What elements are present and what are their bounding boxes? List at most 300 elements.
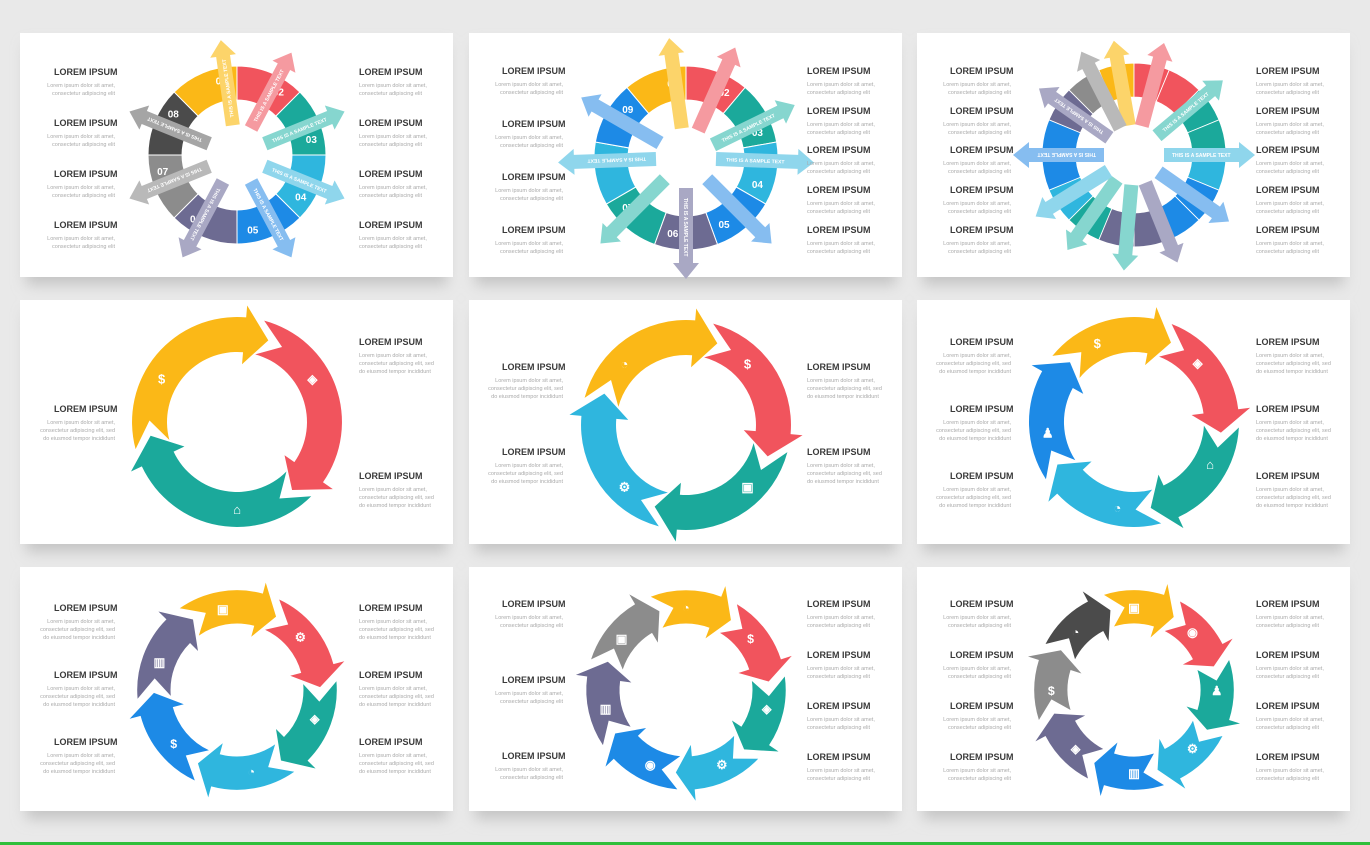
- wheel 1 numbers: 04: [295, 192, 307, 203]
- cycle 6 arrows: [127, 582, 347, 798]
- panel 6 text blocks: consectetur adipiscing elit, sed: [1256, 428, 1331, 434]
- panel 8 text blocks: consectetur adipiscing elit: [807, 725, 870, 731]
- cycle 6 arrows: $: [170, 737, 177, 751]
- wheel 1 arrow strips: THIS IS A SAMPLE TEXT: [253, 69, 286, 123]
- panel 9 text blocks: consectetur adipiscing elit: [1256, 674, 1319, 680]
- panel 8 text blocks: LOREM IPSUM: [502, 599, 566, 609]
- wheel 2 numbers: 08: [604, 154, 616, 165]
- panel 3 text blocks: Lorem ipsum dolor sit amet,: [1256, 122, 1324, 128]
- cycle 3 arrows: ◈: [306, 372, 318, 386]
- panel 5 text blocks: consectetur adipiscing elit, sed: [488, 471, 563, 477]
- wheel 1 numbers: 01: [216, 77, 227, 88]
- panel 7 text blocks: consectetur adipiscing elit, sed: [40, 694, 115, 700]
- panel 3 text blocks: LOREM IPSUM: [950, 106, 1014, 116]
- panel 9 text blocks: Lorem ipsum dolor sit amet,: [1256, 666, 1324, 672]
- panel 7 text blocks: Lorem ipsum dolor sit amet,: [359, 753, 427, 759]
- panel 6 text blocks: consectetur adipiscing elit, sed: [936, 495, 1011, 501]
- panel 7: 6-arrow cycle: [20, 567, 453, 811]
- panel 3 text blocks: Lorem ipsum dolor sit amet,: [943, 161, 1011, 167]
- panel 5: 4-arrow cycle: [469, 296, 902, 554]
- panel 9: 8-arrow cycle: [917, 567, 1350, 811]
- cycle 7 arrows: ▥: [600, 702, 611, 716]
- panel 9 text blocks: Lorem ipsum dolor sit amet,: [943, 666, 1011, 672]
- panel 2 text blocks: LOREM IPSUM: [502, 119, 566, 129]
- panel 9 text blocks: consectetur adipiscing elit: [1256, 725, 1319, 731]
- panel 3 text blocks: Lorem ipsum dolor sit amet,: [943, 82, 1011, 88]
- panel 8 text blocks: Lorem ipsum dolor sit amet,: [495, 615, 563, 621]
- panel 1 text blocks: LOREM IPSUM: [359, 118, 423, 128]
- panel 1 text blocks: LOREM IPSUM: [54, 118, 118, 128]
- panel 1 text blocks: LOREM IPSUM: [359, 67, 423, 77]
- panel 3 text blocks: LOREM IPSUM: [950, 225, 1014, 235]
- panel 3 text blocks: LOREM IPSUM: [1256, 185, 1320, 195]
- panel 6 text blocks: do eiusmod tempor incididunt: [939, 436, 1011, 442]
- panel 7 text blocks: consectetur adipiscing elit, sed: [359, 694, 434, 700]
- panel 4 text blocks: LOREM IPSUM: [359, 471, 423, 481]
- panel 3 text blocks: LOREM IPSUM: [1256, 106, 1320, 116]
- panel 4 text blocks: do eiusmod tempor incididunt: [359, 503, 431, 509]
- cycle 5 arrows: [1027, 302, 1255, 538]
- wheel 1 numbers: [155, 74, 320, 239]
- panel 1 text blocks: Lorem ipsum dolor sit amet,: [359, 236, 427, 242]
- panel 1 text blocks: Lorem ipsum dolor sit amet,: [47, 236, 115, 242]
- panel 7 text blocks: Lorem ipsum dolor sit amet,: [359, 686, 427, 692]
- panel 6 text blocks: Lorem ipsum dolor sit amet,: [1256, 487, 1324, 493]
- panel 5 text blocks: consectetur adipiscing elit, sed: [807, 386, 882, 392]
- panel 8 text blocks: [495, 599, 875, 782]
- panel 2 text blocks: consectetur adipiscing elit: [807, 209, 870, 215]
- panel 3 text blocks: LOREM IPSUM: [950, 66, 1014, 76]
- panel 1: 8-step wheel: [20, 33, 453, 277]
- panel 7 text blocks: do eiusmod tempor incididunt: [43, 769, 115, 775]
- panel 7 text blocks: LOREM IPSUM: [359, 670, 423, 680]
- cycle 7 arrows: ◔: [682, 601, 690, 615]
- panel 3 text blocks: LOREM IPSUM: [950, 145, 1014, 155]
- panel 1 text blocks: consectetur adipiscing elit: [359, 193, 422, 199]
- panel 6 text blocks: consectetur adipiscing elit, sed: [1256, 361, 1331, 367]
- panel 9 text blocks: consectetur adipiscing elit: [948, 725, 1011, 731]
- cycle 3 arrows: ⌂: [233, 502, 241, 517]
- panel 2 text blocks: Lorem ipsum dolor sit amet,: [807, 82, 875, 88]
- panel 8 text blocks: consectetur adipiscing elit: [807, 674, 870, 680]
- wheel 2 numbers: 05: [718, 220, 730, 231]
- panel 9 text blocks: consectetur adipiscing elit: [1256, 776, 1319, 782]
- panel 3 text blocks: Lorem ipsum dolor sit amet,: [943, 201, 1011, 207]
- panel 7 text blocks: do eiusmod tempor incididunt: [359, 702, 431, 708]
- panel 7 text blocks: LOREM IPSUM: [54, 737, 118, 747]
- panel 7 text blocks: do eiusmod tempor incididunt: [43, 635, 115, 641]
- wheel 1 arrow strips: THIS IS A SAMPLE TEXT: [147, 115, 203, 143]
- panel 1 text blocks: consectetur adipiscing elit: [359, 244, 422, 250]
- cycle 7 arrows: ▣: [616, 632, 627, 646]
- panel 5 text blocks: do eiusmod tempor incididunt: [807, 479, 879, 485]
- wheel 2 numbers: 01: [667, 79, 679, 90]
- wheel 3 arrow strips: THIS IS A SAMPLE TEXT: [1037, 151, 1096, 157]
- wheel 1 numbers: 02: [273, 87, 284, 98]
- panel 9 text blocks: [943, 599, 1324, 782]
- panel 9 text blocks: LOREM IPSUM: [1256, 752, 1320, 762]
- panel 5 text blocks: do eiusmod tempor incididunt: [491, 479, 563, 485]
- wheel 3 arrow strips: THIS IS A SAMPLE TEXT: [1054, 96, 1105, 135]
- panel 2 text blocks: Lorem ipsum dolor sit amet,: [495, 135, 563, 141]
- panel 9 text blocks: Lorem ipsum dolor sit amet,: [943, 615, 1011, 621]
- panel 3 text blocks: Lorem ipsum dolor sit amet,: [943, 241, 1011, 247]
- wheel 2 numbers: [604, 77, 767, 242]
- panel 1 text blocks: consectetur adipiscing elit: [52, 91, 115, 97]
- panel 3 text blocks: LOREM IPSUM: [1256, 145, 1320, 155]
- panel 6 text blocks: LOREM IPSUM: [1256, 471, 1320, 481]
- panel 5 text blocks: consectetur adipiscing elit, sed: [807, 471, 882, 477]
- panel 3 text blocks: consectetur adipiscing elit: [948, 209, 1011, 215]
- cycle 7 arrows: ◉: [645, 758, 656, 772]
- panel 6 text blocks: Lorem ipsum dolor sit amet,: [943, 487, 1011, 493]
- panel 7 text blocks: LOREM IPSUM: [359, 603, 423, 613]
- panel 7 text blocks: Lorem ipsum dolor sit amet,: [359, 619, 427, 625]
- wheel 2 arrow strips: THIS IS A SAMPLE TEXT: [587, 155, 646, 163]
- panel 8 text blocks: Lorem ipsum dolor sit amet,: [807, 717, 875, 723]
- panel 6 text blocks: LOREM IPSUM: [950, 471, 1014, 481]
- panel 1 text blocks: consectetur adipiscing elit: [52, 193, 115, 199]
- panel 2 text blocks: consectetur adipiscing elit: [807, 169, 870, 175]
- panel 3 text blocks: [943, 66, 1324, 255]
- panel 5 text blocks: [488, 362, 882, 485]
- panel 2 text blocks: Lorem ipsum dolor sit amet,: [495, 188, 563, 194]
- panel 2 text blocks: LOREM IPSUM: [807, 225, 871, 235]
- panel 1 text blocks: LOREM IPSUM: [359, 220, 423, 230]
- panel 2 text blocks: consectetur adipiscing elit: [807, 130, 870, 136]
- wheel 1 numbers: 08: [168, 110, 179, 121]
- panel 1 text blocks: LOREM IPSUM: [54, 67, 118, 77]
- panel 2 text blocks: consectetur adipiscing elit: [500, 196, 563, 202]
- cycle 7 arrows: ⚙: [716, 758, 727, 772]
- panel 9 text blocks: LOREM IPSUM: [950, 599, 1014, 609]
- cycle 8 arrows: [1028, 584, 1240, 796]
- wheel 2 numbers: 03: [752, 128, 763, 139]
- panel 9 text blocks: consectetur adipiscing elit: [948, 623, 1011, 629]
- cycle 6 arrows: ▥: [153, 655, 165, 669]
- panel 6 text blocks: [936, 337, 1331, 509]
- wheel 1 numbers: 03: [306, 135, 317, 146]
- wheel 2 numbers: 09: [622, 105, 634, 116]
- wheel 2 numbers: 06: [667, 229, 679, 240]
- panel 5 text blocks: do eiusmod tempor incididunt: [807, 394, 879, 400]
- panel 1 text blocks: Lorem ipsum dolor sit amet,: [359, 134, 427, 140]
- panel 8: 7-arrow cycle: [469, 567, 902, 811]
- panel 6 text blocks: LOREM IPSUM: [950, 337, 1014, 347]
- panel 2: 9-step wheel: [469, 33, 902, 279]
- panel 5 text blocks: LOREM IPSUM: [807, 362, 871, 372]
- panel 4 text blocks: Lorem ipsum dolor sit amet,: [359, 353, 427, 359]
- panel 7 text blocks: do eiusmod tempor incididunt: [359, 769, 431, 775]
- panel 2 text blocks: LOREM IPSUM: [502, 66, 566, 76]
- panel 7 text blocks: [40, 603, 434, 775]
- panel 7 text blocks: LOREM IPSUM: [359, 737, 423, 747]
- panel 9 text blocks: LOREM IPSUM: [1256, 701, 1320, 711]
- panel 6 text blocks: consectetur adipiscing elit, sed: [936, 361, 1011, 367]
- panel 7 text blocks: consectetur adipiscing elit, sed: [359, 627, 434, 633]
- panel 8 text blocks: consectetur adipiscing elit: [807, 623, 870, 629]
- wheel 3 arrow strips: THIS IS A SAMPLE TEXT: [1172, 153, 1231, 159]
- cycle 3 arrows: $: [158, 372, 166, 386]
- panel 7 text blocks: consectetur adipiscing elit, sed: [40, 627, 115, 633]
- panel 3 text blocks: consectetur adipiscing elit: [1256, 90, 1319, 96]
- cycle 4 arrows: $: [744, 356, 752, 371]
- panel 3 text blocks: consectetur adipiscing elit: [948, 249, 1011, 255]
- wheel 2 numbers: 02: [718, 88, 730, 99]
- panel 1 text blocks: consectetur adipiscing elit: [359, 142, 422, 148]
- wheel 2: [590, 61, 782, 250]
- panel 6 text blocks: Lorem ipsum dolor sit amet,: [1256, 353, 1324, 359]
- panel 6 text blocks: consectetur adipiscing elit, sed: [936, 428, 1011, 434]
- panel 7 text blocks: Lorem ipsum dolor sit amet,: [47, 686, 115, 692]
- panel 2 text blocks: consectetur adipiscing elit: [500, 249, 563, 255]
- wheel 1 arrow strips: THIS IS A SAMPLE TEXT: [146, 166, 203, 193]
- panel 6 text blocks: do eiusmod tempor incididunt: [1256, 436, 1328, 442]
- panel 6 text blocks: LOREM IPSUM: [950, 404, 1014, 414]
- panel 4 text blocks: LOREM IPSUM: [54, 404, 118, 414]
- panel 7 text blocks: LOREM IPSUM: [54, 670, 118, 680]
- cycle 3 arrows: [101, 281, 368, 540]
- cycle 7 arrows: [575, 586, 795, 803]
- panel 5 text blocks: Lorem ipsum dolor sit amet,: [807, 378, 875, 384]
- wheel 1 numbers: 05: [247, 225, 259, 236]
- cycle 8 arrows: ◔: [1072, 625, 1079, 639]
- panel 2 text blocks: consectetur adipiscing elit: [807, 249, 870, 255]
- wheel 2 numbers: 04: [752, 180, 763, 191]
- wheel 1 arrow strips: THIS IS A SAMPLE TEXT: [222, 59, 236, 118]
- panel 1 text blocks: consectetur adipiscing elit: [52, 142, 115, 148]
- panel 2 text blocks: consectetur adipiscing elit: [807, 90, 870, 96]
- panel 7 text blocks: do eiusmod tempor incididunt: [43, 702, 115, 708]
- panel 1 text blocks: Lorem ipsum dolor sit amet,: [47, 83, 115, 89]
- panel 4 text blocks: [40, 337, 434, 509]
- cycle 7 arrows: ◈: [761, 702, 772, 716]
- panel 9 text blocks: LOREM IPSUM: [1256, 650, 1320, 660]
- panel 2 text blocks: LOREM IPSUM: [807, 106, 871, 116]
- panel 4 text blocks: consectetur adipiscing elit, sed: [359, 361, 434, 367]
- panel 2 text blocks: LOREM IPSUM: [502, 225, 566, 235]
- cycle 8 arrows: ♟: [1211, 684, 1222, 698]
- cycle 6 arrows: ◈: [309, 712, 320, 726]
- panel 5 text blocks: Lorem ipsum dolor sit amet,: [495, 463, 563, 469]
- wheel 3 arrow strips: [1013, 39, 1255, 272]
- panel 5 text blocks: consectetur adipiscing elit, sed: [488, 386, 563, 392]
- panel 7 text blocks: consectetur adipiscing elit, sed: [359, 761, 434, 767]
- panel 8 text blocks: LOREM IPSUM: [807, 650, 871, 660]
- panel 7 text blocks: consectetur adipiscing elit, sed: [40, 761, 115, 767]
- panel 4 text blocks: consectetur adipiscing elit, sed: [40, 428, 115, 434]
- cycle 6 arrows: ◔: [248, 765, 255, 779]
- panel 9 text blocks: LOREM IPSUM: [950, 752, 1014, 762]
- panel 7 text blocks: Lorem ipsum dolor sit amet,: [47, 753, 115, 759]
- panel 5 text blocks: LOREM IPSUM: [502, 447, 566, 457]
- panel 6 text blocks: do eiusmod tempor incididunt: [1256, 503, 1328, 509]
- wheel 1 arrow strips: [125, 38, 349, 264]
- panel 4 text blocks: Lorem ipsum dolor sit amet,: [359, 487, 427, 493]
- cycle 8 arrows: ◉: [1187, 625, 1198, 639]
- panel 8 text blocks: LOREM IPSUM: [807, 752, 871, 762]
- panel 4 text blocks: consectetur adipiscing elit, sed: [359, 495, 434, 501]
- panel 2 text blocks: LOREM IPSUM: [502, 172, 566, 182]
- panel 9 text blocks: consectetur adipiscing elit: [1256, 623, 1319, 629]
- wheel 1 arrow strips: THIS IS A SAMPLE TEXT: [271, 167, 327, 195]
- panel 3 text blocks: LOREM IPSUM: [1256, 225, 1320, 235]
- panel 1 text blocks: Lorem ipsum dolor sit amet,: [359, 185, 427, 191]
- panel 5 text blocks: LOREM IPSUM: [502, 362, 566, 372]
- panel 8 text blocks: LOREM IPSUM: [502, 675, 566, 685]
- cycle 5 arrows: ⌂: [1206, 457, 1214, 472]
- wheel 3 arrow strips: THIS IS A SAMPLE TEXT: [1162, 91, 1211, 134]
- panel 9 text blocks: LOREM IPSUM: [950, 650, 1014, 660]
- wheel 2 arrow strips: THIS IS A SAMPLE TEXT: [726, 157, 785, 165]
- panel 3 text blocks: consectetur adipiscing elit: [1256, 130, 1319, 136]
- panel 9 text blocks: Lorem ipsum dolor sit amet,: [943, 768, 1011, 774]
- wheel 1 arrow strips: THIS IS A SAMPLE TEXT: [251, 188, 284, 242]
- cycle 8 arrows: ⚙: [1187, 742, 1198, 756]
- panel 3 text blocks: consectetur adipiscing elit: [948, 90, 1011, 96]
- wheel 2 arrow strips: THIS IS A SAMPLE TEXT: [721, 113, 776, 144]
- wheel 2 arrow strips: THIS IS A SAMPLE TEXT: [682, 198, 688, 257]
- panel 9 text blocks: Lorem ipsum dolor sit amet,: [943, 717, 1011, 723]
- panel 4 text blocks: LOREM IPSUM: [359, 337, 423, 347]
- panel 9 text blocks: Lorem ipsum dolor sit amet,: [1256, 768, 1324, 774]
- panel 3 text blocks: Lorem ipsum dolor sit amet,: [943, 122, 1011, 128]
- panel 1 text blocks: Lorem ipsum dolor sit amet,: [47, 134, 115, 140]
- wheel 1 numbers: 07: [157, 167, 169, 178]
- panel 3 text blocks: Lorem ipsum dolor sit amet,: [1256, 161, 1324, 167]
- panel 4 text blocks: Lorem ipsum dolor sit amet,: [47, 420, 115, 426]
- cycle 6 arrows: ⚙: [295, 631, 306, 645]
- panel 8 text blocks: LOREM IPSUM: [807, 701, 871, 711]
- cycle 7 arrows: $: [747, 632, 754, 646]
- panel 6 text blocks: do eiusmod tempor incididunt: [939, 369, 1011, 375]
- panel 1 text blocks: [47, 67, 427, 250]
- panel 2 text blocks: LOREM IPSUM: [807, 145, 871, 155]
- cycle 4 arrows: ◔: [621, 356, 628, 371]
- wheel 1 arrow strips: THIS IS A SAMPLE TEXT: [188, 187, 221, 241]
- panel 1 text blocks: consectetur adipiscing elit: [52, 244, 115, 250]
- wheel 1 numbers: 06: [190, 215, 202, 226]
- panel 6 text blocks: LOREM IPSUM: [1256, 337, 1320, 347]
- panel 6 text blocks: Lorem ipsum dolor sit amet,: [943, 420, 1011, 426]
- panel 3 text blocks: consectetur adipiscing elit: [1256, 169, 1319, 175]
- panel 3 text blocks: Lorem ipsum dolor sit amet,: [1256, 241, 1324, 247]
- panel 2 text blocks: Lorem ipsum dolor sit amet,: [495, 241, 563, 247]
- cycle 5 arrows: $: [1094, 336, 1102, 351]
- panel 8 text blocks: LOREM IPSUM: [807, 599, 871, 609]
- panel 7 text blocks: LOREM IPSUM: [54, 603, 118, 613]
- panel 6 text blocks: consectetur adipiscing elit, sed: [1256, 495, 1331, 501]
- wheel 1 arrow strips: THIS IS A SAMPLE TEXT: [271, 117, 328, 144]
- panel 1 text blocks: LOREM IPSUM: [54, 220, 118, 230]
- panel 5 text blocks: LOREM IPSUM: [807, 447, 871, 457]
- cycle 8 arrows: ▥: [1128, 766, 1140, 780]
- panel 7 text blocks: do eiusmod tempor incididunt: [359, 635, 431, 641]
- panel 6 text blocks: do eiusmod tempor incididunt: [939, 503, 1011, 509]
- panel 2 text blocks: consectetur adipiscing elit: [500, 90, 563, 96]
- panel 9 text blocks: Lorem ipsum dolor sit amet,: [1256, 615, 1324, 621]
- panel 5 text blocks: do eiusmod tempor incididunt: [491, 394, 563, 400]
- panel 2 text blocks: consectetur adipiscing elit: [500, 143, 563, 149]
- panel 8 text blocks: consectetur adipiscing elit: [500, 699, 563, 705]
- cycle 5 arrows: ♟: [1042, 426, 1053, 441]
- panel 2 text blocks: Lorem ipsum dolor sit amet,: [807, 122, 875, 128]
- panel 3 text blocks: consectetur adipiscing elit: [1256, 209, 1319, 215]
- panel 8 text blocks: Lorem ipsum dolor sit amet,: [807, 615, 875, 621]
- panel 6: 5-arrow cycle: [917, 300, 1350, 544]
- panel 2 text blocks: LOREM IPSUM: [807, 66, 871, 76]
- cycle 5 arrows: ◔: [1113, 500, 1121, 515]
- cycle 5 arrows: ◈: [1192, 356, 1204, 371]
- panel 1 text blocks: LOREM IPSUM: [54, 169, 118, 179]
- panel 3 text blocks: consectetur adipiscing elit: [948, 169, 1011, 175]
- panel 2 text blocks: Lorem ipsum dolor sit amet,: [807, 201, 875, 207]
- wheel 3: [1040, 61, 1228, 249]
- cycle 4 arrows: [557, 296, 815, 554]
- cycle 4 arrows: ▣: [741, 480, 754, 495]
- panel 3 text blocks: Lorem ipsum dolor sit amet,: [1256, 201, 1324, 207]
- panel 3 text blocks: Lorem ipsum dolor sit amet,: [1256, 82, 1324, 88]
- panel 7 text blocks: Lorem ipsum dolor sit amet,: [47, 619, 115, 625]
- panel 8 text blocks: Lorem ipsum dolor sit amet,: [495, 691, 563, 697]
- panel 2 text blocks: Lorem ipsum dolor sit amet,: [807, 161, 875, 167]
- panel 1 text blocks: consectetur adipiscing elit: [359, 91, 422, 97]
- panel 5 text blocks: Lorem ipsum dolor sit amet,: [495, 378, 563, 384]
- panel 4 text blocks: do eiusmod tempor incididunt: [359, 369, 431, 375]
- cycle 8 arrows: ▣: [1128, 601, 1140, 615]
- panel 1 text blocks: LOREM IPSUM: [359, 169, 423, 179]
- panel 9 text blocks: LOREM IPSUM: [950, 701, 1014, 711]
- panel 8 text blocks: Lorem ipsum dolor sit amet,: [495, 767, 563, 773]
- panel 8 text blocks: consectetur adipiscing elit: [500, 623, 563, 629]
- panel 3 text blocks: consectetur adipiscing elit: [948, 130, 1011, 136]
- panel 6 text blocks: Lorem ipsum dolor sit amet,: [1256, 420, 1324, 426]
- panel 3 text blocks: LOREM IPSUM: [1256, 66, 1320, 76]
- panel 9 text blocks: LOREM IPSUM: [1256, 599, 1320, 609]
- panel 1 text blocks: Lorem ipsum dolor sit amet,: [359, 83, 427, 89]
- panel 4: 3-arrow cycle: [20, 281, 453, 544]
- panel 9 text blocks: Lorem ipsum dolor sit amet,: [1256, 717, 1324, 723]
- cycle 8 arrows: ◈: [1070, 742, 1081, 756]
- green bottom line: [0, 842, 1370, 845]
- panel 2 text blocks: LOREM IPSUM: [807, 185, 871, 195]
- panel 2 text blocks: [495, 66, 875, 255]
- panel 4 text blocks: do eiusmod tempor incididunt: [43, 436, 115, 442]
- panel 6 text blocks: do eiusmod tempor incididunt: [1256, 369, 1328, 375]
- panel 3 text blocks: consectetur adipiscing elit: [1256, 249, 1319, 255]
- panel 8 text blocks: consectetur adipiscing elit: [807, 776, 870, 782]
- panel 3 text blocks: LOREM IPSUM: [950, 185, 1014, 195]
- panel 8 text blocks: Lorem ipsum dolor sit amet,: [807, 768, 875, 774]
- cycle 4 arrows: ⚙: [619, 480, 630, 495]
- panel 6 text blocks: LOREM IPSUM: [1256, 404, 1320, 414]
- panel 1 text blocks: Lorem ipsum dolor sit amet,: [47, 185, 115, 191]
- wheel 2 arrow strips: [558, 36, 814, 279]
- panel 5 text blocks: Lorem ipsum dolor sit amet,: [807, 463, 875, 469]
- panel 9 text blocks: consectetur adipiscing elit: [948, 674, 1011, 680]
- panel 8 text blocks: Lorem ipsum dolor sit amet,: [807, 666, 875, 672]
- panel 6 text blocks: Lorem ipsum dolor sit amet,: [943, 353, 1011, 359]
- panel 9 text blocks: consectetur adipiscing elit: [948, 776, 1011, 782]
- panel 8 text blocks: consectetur adipiscing elit: [500, 775, 563, 781]
- wheel 1: [142, 60, 332, 250]
- panel 2 text blocks: Lorem ipsum dolor sit amet,: [495, 82, 563, 88]
- cycle 8 arrows: $: [1048, 684, 1055, 698]
- panel 2 text blocks: Lorem ipsum dolor sit amet,: [807, 241, 875, 247]
- panel 3: 16-segment wheel: [917, 33, 1350, 277]
- panel 8 text blocks: LOREM IPSUM: [502, 751, 566, 761]
- wheel 2 numbers: 07: [622, 203, 634, 214]
